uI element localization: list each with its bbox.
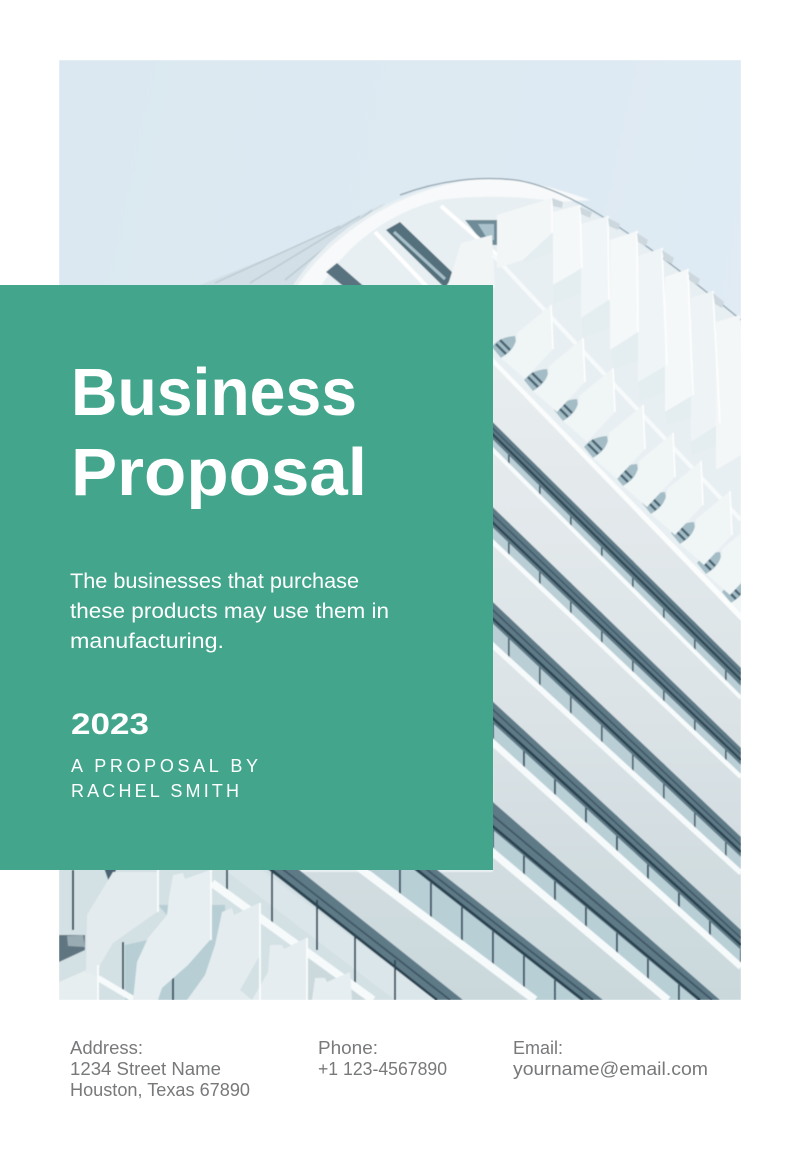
contact: phone: +1 123-4567890 <box>318 1059 447 1079</box>
title: Proposal <box>71 435 367 510</box>
contact: address: Houston, Texas 67890 <box>70 1080 250 1100</box>
floor G and lower-left glass <box>59 865 463 1000</box>
year: 2023 <box>71 708 149 741</box>
author line: A PROPOSAL BY <box>71 756 258 776</box>
floor A <box>493 422 741 700</box>
floor D <box>493 701 741 970</box>
description text <box>70 570 389 653</box>
concrete wall <box>302 580 741 1000</box>
roof rim line <box>400 179 741 320</box>
description text: The businesses that purchase <box>70 570 359 593</box>
strut behind fins <box>493 255 741 520</box>
sky <box>59 60 741 318</box>
contact: address: Address: <box>70 1038 143 1058</box>
building facade mass <box>293 186 740 872</box>
floor C <box>493 602 741 875</box>
contact: phone: Phone: <box>318 1038 378 1058</box>
floor F <box>356 870 603 1000</box>
description text: manufacturing. <box>70 630 224 653</box>
description text: these products may use them in <box>70 600 389 623</box>
photo: white curved building against pale sky <box>59 60 783 1000</box>
title: Business <box>71 355 357 430</box>
author line <box>71 756 258 801</box>
contact: email: Email: <box>513 1038 563 1058</box>
fin ledge <box>493 358 741 621</box>
diagonal row of fins and small windows <box>493 305 741 603</box>
floor B <box>493 506 741 778</box>
contact: email <box>513 1038 708 1079</box>
building roof side stripes <box>195 203 385 287</box>
lower-left fins <box>59 866 352 1000</box>
white roof arc <box>296 178 590 288</box>
contact: email: yourname@email.com <box>513 1059 708 1079</box>
title <box>71 355 367 510</box>
author line: RACHEL SMITH <box>71 781 239 801</box>
upper inner windows <box>326 206 505 290</box>
contact: address: 1234 Street Name <box>70 1059 221 1079</box>
upper vertical blades <box>497 198 746 470</box>
green title panel <box>0 285 493 870</box>
contact: address <box>70 1038 250 1100</box>
floor E <box>493 801 720 1000</box>
contact: phone <box>318 1038 447 1079</box>
